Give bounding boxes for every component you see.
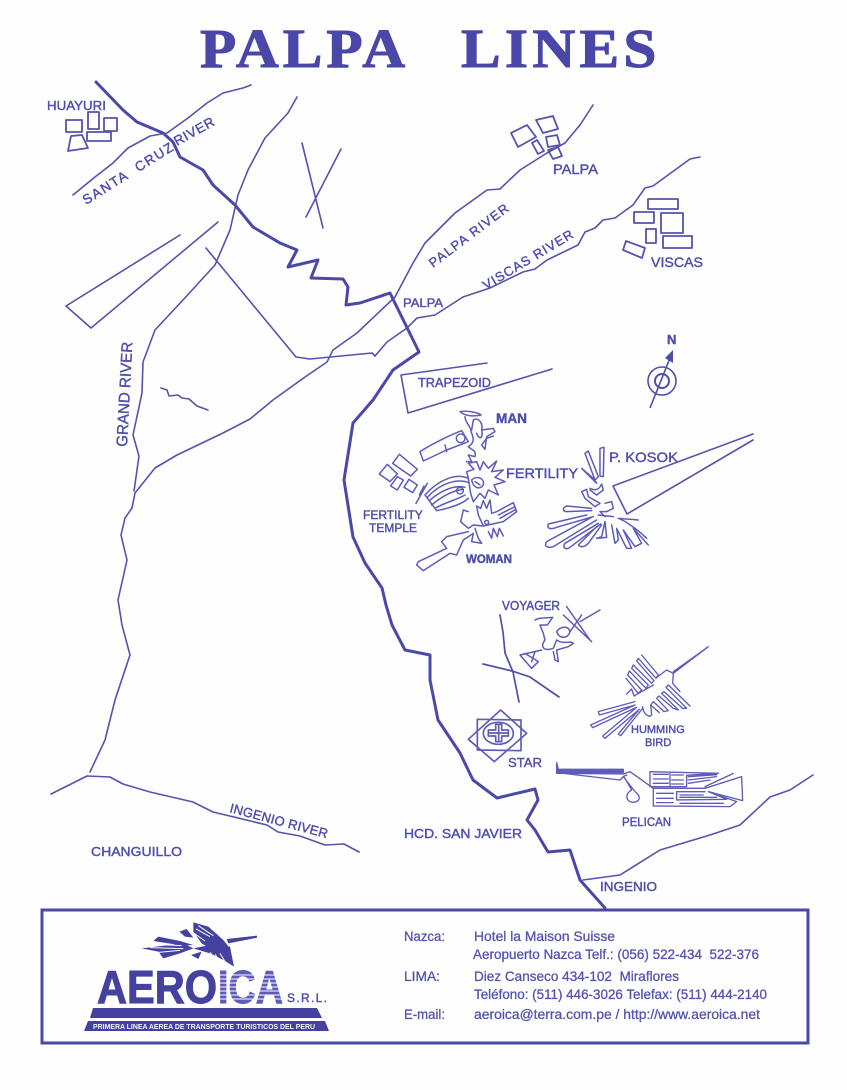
label: river (Santa Cruz): RIVER (171, 114, 217, 149)
map: rivers and lines (51, 82, 813, 908)
compass (648, 332, 676, 408)
label: Palpa river: PALPA RIVER (426, 201, 511, 270)
main road (96, 82, 605, 908)
Nazca airport: Aeropuerto Nazca Telf.: (056) 522-434 522-376 (473, 946, 759, 962)
contact info (404, 928, 767, 1022)
label: Viscas river: VISCAS RIVER (480, 227, 576, 293)
title: LINES (461, 19, 656, 79)
geoglyph: pelican (557, 763, 743, 807)
label: Grand river: GRAND RIVER (114, 341, 136, 447)
label: Palpa town: PALPA (553, 162, 598, 177)
Nazca: Nazca: (404, 928, 445, 944)
logo tagline band (84, 1021, 329, 1031)
label: Man: MAN (496, 410, 527, 426)
geoglyph: woman (417, 500, 517, 571)
label: Woman: WOMAN (466, 552, 512, 566)
Lima address: Diez Canseco 434-102 Miraflores (474, 968, 679, 984)
geoglyph: fertility temple (379, 454, 427, 503)
label: Pelican: PELICAN (622, 817, 671, 829)
settlement: Viscas (623, 199, 692, 258)
crossing lines (302, 143, 341, 228)
logo bird (142, 922, 257, 967)
geoglyph: star (468, 710, 527, 762)
logo band (90, 1008, 322, 1018)
label: Santa Cruz river: SANTA CRUZ (80, 140, 176, 208)
field line (206, 248, 375, 359)
Lima phone: Teléfono: (511) 446-3026 Telefax: (511) 444-2140 (474, 986, 767, 1002)
wedge: p. kosok (613, 434, 753, 514)
Ingenio east river (583, 775, 813, 880)
label: Fertility temple: TEMPLE (369, 521, 417, 535)
geoglyph: fertility (425, 461, 505, 511)
logo wordmark: ICA (218, 961, 283, 1013)
title: PALPA (200, 19, 405, 79)
label: Ingenio river: INGENIO RIVER (228, 800, 330, 841)
Palpa river (132, 105, 593, 508)
logo S.R.L.: S.R.L. (287, 991, 327, 1005)
settlement: Huayuri (66, 112, 117, 151)
footer panel (42, 910, 808, 1043)
label: Fertility: FERTILITY (506, 465, 579, 481)
title (200, 19, 656, 79)
Email address: aeroica@terra.com.pe / http://www.aeroica.net (474, 1006, 760, 1022)
label: Fertility temple: FERTILITY (363, 508, 423, 522)
label: P. Kosok: P. KOSOK (609, 449, 679, 465)
label: Changuillo: CHANGUILLO (91, 844, 182, 859)
logo: Aeroica (84, 922, 329, 1031)
label: Ingenio: INGENIO (600, 880, 657, 894)
label: Viscas: VISCAS (651, 255, 703, 270)
label: Trapezoid: TRAPEZOID (418, 376, 491, 390)
Nazca hotel: Hotel la Maison Suisse (474, 928, 615, 944)
label: Voyager: VOYAGER (502, 599, 560, 613)
squiggle (161, 388, 208, 410)
Santa Cruz river (73, 85, 251, 195)
label: Humming bird: BIRD (645, 737, 671, 749)
Ingenio river (51, 776, 359, 852)
trapezoid geoglyph (401, 363, 552, 413)
voyager crossing lines (483, 615, 559, 702)
geoglyph: p. kosok spider figure (546, 447, 648, 549)
Email: E-mail: (404, 1006, 445, 1022)
map labels (47, 98, 703, 894)
logo tagline: PRIMERA LINEA AEREA DE TRANSPORTE TURISTICOS DEL PERU (93, 1022, 315, 1031)
label: Star: STAR (508, 755, 542, 770)
footer frame (42, 910, 808, 1043)
geoglyph: voyager (520, 607, 600, 668)
settlement: Palpa (511, 116, 562, 159)
logo stripes (216, 975, 286, 999)
label: Humming bird: HUMMING (631, 724, 685, 736)
label: Palpa junction: PALPA (403, 296, 443, 310)
Grand river (90, 97, 297, 772)
geoglyph: man (420, 411, 495, 462)
logo wordmark: AERO (97, 961, 217, 1013)
label: Huayuri: HUAYURI (47, 98, 106, 113)
wedge geoglyph (66, 222, 218, 328)
Viscas river (375, 157, 700, 356)
geoglyph: hummingbird (591, 647, 708, 738)
Lima: LIMA: (404, 968, 440, 984)
compass: N (667, 332, 676, 347)
label: Hcd. San Javier: HCD. SAN JAVIER (404, 827, 522, 841)
